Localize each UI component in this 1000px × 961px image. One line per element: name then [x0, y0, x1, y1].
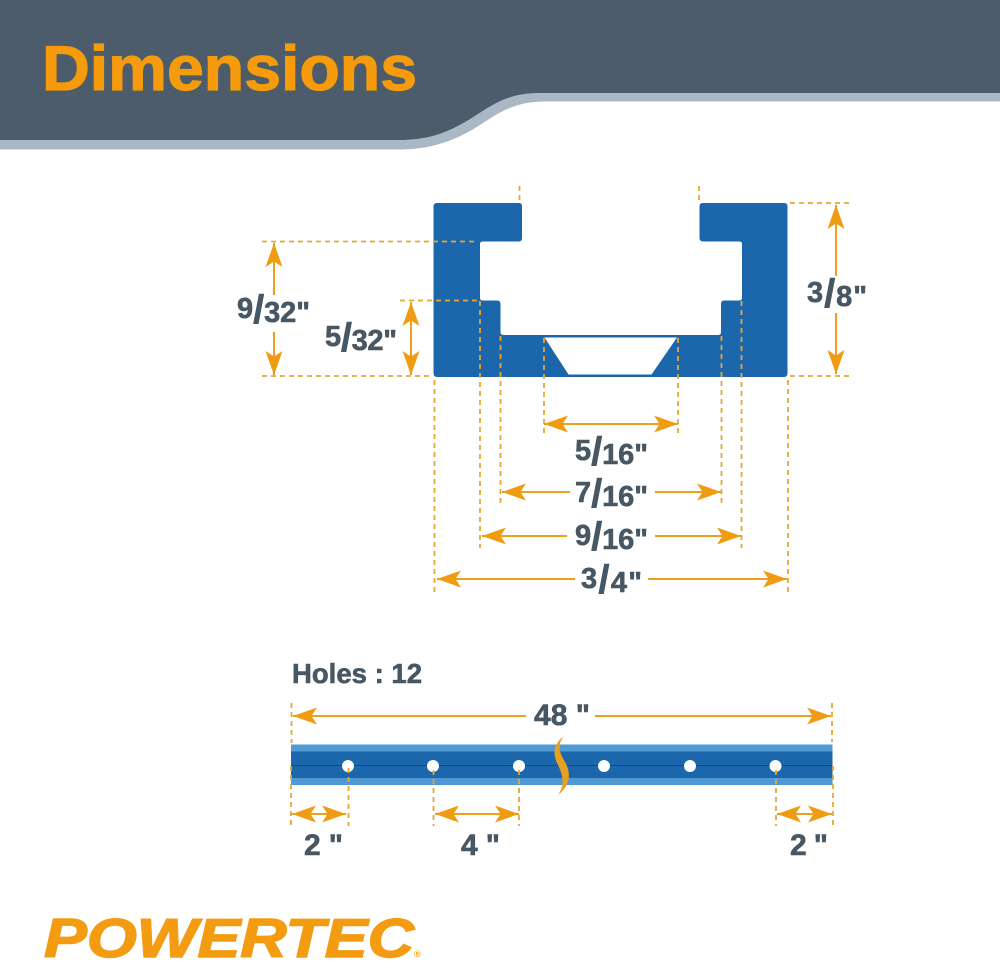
5/16 inch dimension: [544, 424, 678, 474]
7/16 inch dimension: 7: [575, 477, 591, 509]
5/16 inch dimension: 16": [602, 439, 648, 471]
4 inch spacing dimension: [435, 814, 519, 862]
break mark: [554, 736, 569, 795]
POWERTEC logo: ®: [414, 949, 421, 959]
9/32 inch dimension: /: [253, 288, 264, 332]
dimension guide lines for the cross-section: [262, 186, 850, 592]
7/16 inch dimension: [502, 472, 721, 516]
48 inch length dimension: [292, 699, 832, 743]
7/16 inch dimension: /: [591, 472, 602, 516]
3/8 inch dimension: [807, 205, 867, 374]
9/32 inch dimension: [237, 243, 310, 375]
5/16 inch dimension: 5: [575, 435, 591, 467]
3/4 inch dimension: 3: [581, 563, 597, 595]
left 2 inch dimension: 2 ": [304, 829, 343, 862]
9/16 inch dimension: [482, 515, 741, 559]
3/4 inch dimension: [437, 558, 787, 602]
3/8 inch dimension: /: [824, 272, 835, 316]
9/16 inch dimension: /: [591, 515, 602, 559]
left 2 inch dimension: [292, 814, 346, 862]
9/16 inch dimension: 16": [602, 524, 648, 556]
4 inch spacing dimension: 4 ": [461, 829, 500, 862]
3/8 inch dimension: 3: [807, 277, 823, 309]
7/16 inch dimension: 16": [602, 481, 648, 513]
9/32 inch dimension: 9: [237, 293, 253, 325]
header banner: [0, 0, 1000, 150]
3/4 inch dimension: /: [598, 558, 610, 602]
title: Dimensions: [42, 34, 417, 104]
right 2 inch dimension: [777, 814, 832, 862]
9/16 inch dimension: 9: [575, 520, 591, 552]
5/32 inch dimension: [325, 302, 411, 375]
5/32 inch dimension: 32": [352, 325, 397, 357]
3/8 inch dimension: 8": [836, 281, 867, 313]
5/32 inch dimension: /: [341, 316, 352, 360]
track side view with holes: [291, 744, 832, 785]
5/32 inch dimension: 5: [325, 321, 341, 353]
right 2 inch dimension: 2 ": [790, 829, 828, 862]
hole spacing guide lines: [291, 766, 833, 826]
5/16 inch dimension: /: [591, 430, 602, 474]
3/4 inch dimension: 4": [611, 567, 642, 599]
T-track cross-section profile: [434, 203, 788, 377]
48 inch length dimension: 48 ": [534, 699, 590, 732]
9/32 inch dimension: 32": [264, 297, 310, 329]
holes count heading: Holes : 12: [292, 658, 422, 689]
